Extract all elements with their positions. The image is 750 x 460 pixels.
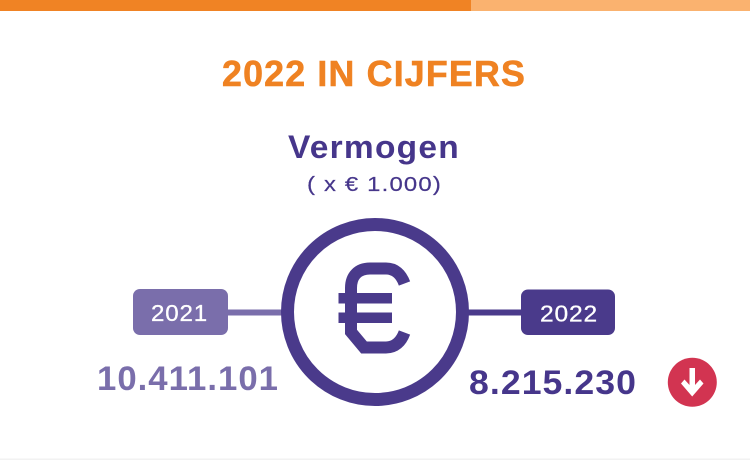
value 2022: 8.215.230 [469,364,637,402]
icon: red down arrow [668,358,717,407]
heading: Vermogen: Vermogen [288,129,460,165]
connector line 2021 [226,310,286,316]
euro circle icon [288,224,462,400]
connector line 2022 [464,310,524,316]
value 2021: 10.411.101 [97,360,279,398]
icon: euro sign [338,268,404,348]
badge: 2021: 2021 [151,300,208,326]
badge: 2022 [521,290,615,335]
title: 2022 IN CIJFERS [222,53,526,94]
badge: 2021 [133,289,228,335]
unit note: ( x € 1.000) [307,174,442,196]
top progress bar [0,0,750,11]
badge: 2022: 2022 [540,300,598,326]
